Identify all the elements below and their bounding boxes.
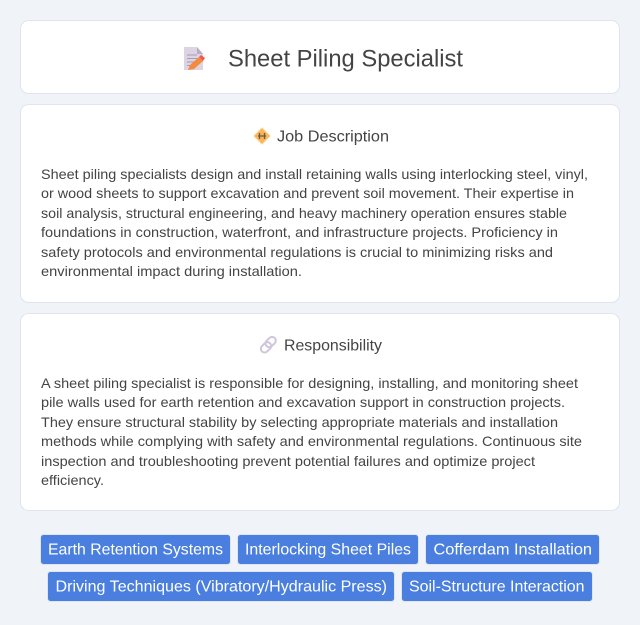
tag: cofferdam installation [426, 534, 600, 564]
panel: title header [20, 20, 620, 94]
text block: responsibility: methods while complying with safety and environmental regulations. Continuous site [41, 433, 582, 449]
text block: job description: safety protocols and environmental regulations is crucial to minimizing risks and [41, 244, 553, 260]
panel: responsibility [20, 314, 620, 510]
text block: responsibility: efficiency. [41, 472, 104, 488]
text block: responsibility: A sheet piling specialist is responsible for designing, installing, and monitoring sheet [41, 375, 578, 391]
tag: soil-structure interaction [402, 572, 592, 602]
tag: earth retention systems: Earth Retention Systems [48, 542, 223, 558]
tag: cofferdam installation: Cofferdam Installation [434, 542, 592, 558]
tag: earth retention systems [40, 534, 230, 564]
icon: document with pencil [184, 47, 205, 70]
text block: responsibility: inspection and troubleshooting prevent potential failures and optimize project [41, 453, 535, 469]
icon: chain link [259, 335, 277, 354]
title: Sheet Piling Specialist [228, 46, 463, 72]
tag: driving techniques: Driving Techniques (Vibratory/Hydraulic Press) [56, 578, 387, 596]
text block: job description [41, 166, 588, 279]
text block: responsibility: They ensure structural stability by selecting appropriate materials and installation [41, 414, 558, 430]
text block: job description: Sheet piling specialists design and install retaining walls using interlocking steel, vinyl, [41, 166, 588, 182]
text block: job description: environmental impact during installation. [41, 263, 302, 279]
panel: job description [20, 104, 620, 302]
tag: interlocking sheet piles: Interlocking Sheet Piles [245, 542, 411, 558]
icon: road sign [254, 128, 270, 144]
text block: job description: soil analysis, structural engineering, and heavy machinery operation ensures stable [41, 205, 567, 221]
tag: interlocking sheet piles [238, 534, 418, 564]
text block: job description: or wood sheets to support excavation and prevent soil movement. Their expertise in [41, 185, 574, 201]
text block: job description: foundations in construction, waterfront, and infrastructure projects. Proficiency in [41, 224, 558, 240]
heading: responsibility: Responsibility [284, 338, 382, 354]
text block: responsibility: pile walls used for earth retention and excavation support in construction projects. [41, 394, 565, 410]
heading: job description: Job Description [277, 128, 389, 146]
tag: driving techniques [48, 572, 394, 602]
tags: skills [40, 534, 600, 602]
text block: responsibility [41, 375, 582, 488]
tag: soil-structure interaction: Soil-Structure Interaction [409, 578, 584, 596]
